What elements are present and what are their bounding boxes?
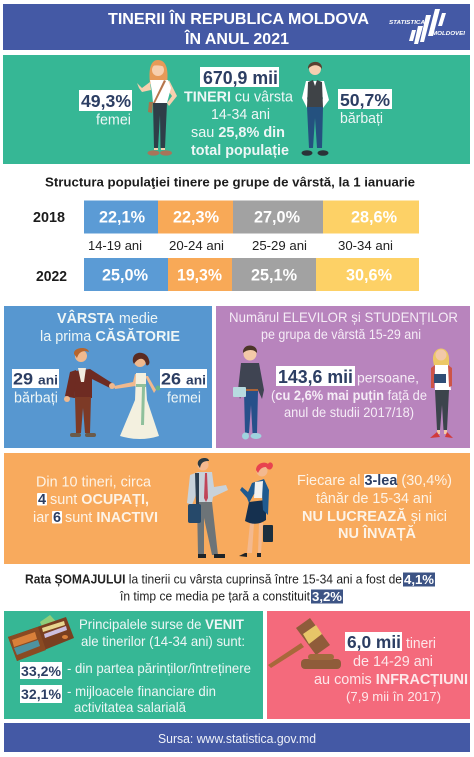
figure: groom bbox=[64, 348, 115, 437]
bar 2018: 28,6% bbox=[351, 208, 397, 226]
text: unemployment rate: Rata ȘOMAJULUI la tinerii cu vârsta cuprinsă între 15-34 ani a fost de bbox=[25, 572, 402, 586]
marriage heading: la prima CĂSĂTORIE bbox=[40, 328, 180, 345]
bar 2022 bbox=[36, 258, 419, 291]
panel: offences bbox=[267, 611, 470, 719]
income heading: ale tinerilor (14-34 ani) sunt: bbox=[81, 633, 245, 649]
stat: 49,3% women bbox=[79, 90, 132, 128]
stat: 32,1% salary bbox=[20, 683, 216, 715]
stat: 29 years men bbox=[12, 369, 59, 406]
age group labels: 14-19 ani bbox=[88, 238, 142, 253]
stat: 32,1% salary: - mijloacele financiare din bbox=[67, 683, 216, 699]
pupils heading: pe grupa de vârstă 15-29 ani bbox=[261, 326, 421, 342]
footer: source: Sursa: www.statistica.gov.md bbox=[158, 731, 316, 746]
bar 2018 bbox=[33, 200, 419, 234]
stat: 670,9 mii youth bbox=[184, 67, 294, 159]
figure: young woman bbox=[137, 60, 177, 156]
pupils heading bbox=[229, 309, 458, 342]
marriage heading: VÂRSTA medie bbox=[57, 309, 158, 327]
bar 2022: 30,6% bbox=[346, 266, 392, 284]
age group labels: 25-29 ani bbox=[252, 238, 307, 253]
stat: 670,9 mii youth: TINERI cu vârsta bbox=[184, 90, 294, 106]
stat: 143,6 thousand persons: (cu 2,6% mai puțin față de bbox=[271, 387, 427, 403]
text: unemployment rate bbox=[25, 572, 435, 604]
logo: Statistica Moldovei: MOLDOVEI bbox=[432, 31, 466, 37]
title: ÎN ANUL 2021 bbox=[184, 29, 289, 48]
bar 2022: 25,1% bbox=[251, 266, 297, 284]
title: TINERII ÎN REPUBLICA MOLDOVA bbox=[108, 9, 369, 28]
stat: 50,7% men bbox=[338, 89, 392, 127]
stat: 670,9 mii youth: 670,9 mii bbox=[203, 68, 278, 88]
age group labels bbox=[88, 238, 393, 253]
text: occupied and inactive: iar 6 sunt INACTIVI bbox=[33, 509, 158, 526]
bar 2018: 2018 bbox=[33, 210, 65, 226]
stat: 143,6 thousand persons: 143,6 mii bbox=[278, 367, 353, 387]
text: unemployment rate: 4,1% bbox=[404, 572, 434, 587]
figure: male student bbox=[233, 346, 264, 440]
header panel bbox=[3, 4, 470, 50]
logo: Statistica Moldovei bbox=[389, 9, 466, 44]
stat: 6,0 thousand youth: tineri bbox=[406, 636, 436, 652]
text: not working nor studying bbox=[297, 473, 452, 542]
stat: 32,1% salary: activitatea salarială bbox=[74, 699, 186, 715]
text: unemployment rate: 3,2% bbox=[312, 589, 342, 604]
text: occupied and inactive bbox=[33, 474, 158, 526]
text: not working nor studying: tânăr de 15-34 ani bbox=[316, 491, 432, 507]
bar 2018: 22,3% bbox=[173, 208, 219, 226]
stat: 33,2% parents bbox=[20, 660, 251, 680]
text: occupied and inactive: 4 sunt OCUPAȚI, bbox=[38, 491, 149, 508]
text: unemployment rate: în timp ce media pe țară a constituit bbox=[119, 588, 310, 604]
panel: employment bbox=[4, 453, 470, 564]
panel: income sources bbox=[4, 611, 263, 719]
stat: 6,0 thousand youth: 6,0 mii bbox=[347, 632, 401, 652]
stat: 143,6 thousand persons bbox=[271, 366, 427, 420]
bar 2022: 19,3% bbox=[177, 266, 222, 284]
age group labels: 30-34 ani bbox=[338, 238, 393, 253]
chart heading: Structura populaţiei tinere pe grupe de vârstă, la 1 ianuarie bbox=[45, 174, 415, 190]
income heading bbox=[79, 616, 245, 649]
stat: 49,3% women: femei bbox=[96, 112, 131, 128]
figure: young man bbox=[302, 62, 329, 156]
pupils heading: Numărul ELEVILOR și STUDENȚILOR bbox=[229, 309, 458, 325]
stat: 49,3% women: 49,3% bbox=[81, 91, 131, 111]
bar 2018: 27,0% bbox=[254, 208, 300, 226]
figure: bride bbox=[114, 353, 160, 439]
text: not working nor studying: NU LUCREAZĂ și nici bbox=[302, 508, 447, 525]
title bbox=[108, 9, 369, 48]
stat: 26 years women: femei bbox=[167, 390, 201, 406]
figure: businesswoman bbox=[239, 462, 273, 557]
stat: 670,9 mii youth: total populație bbox=[191, 143, 289, 159]
stat: 26 years women bbox=[160, 369, 207, 406]
stacked bar chart: age structure bbox=[33, 200, 419, 291]
stat: 50,7% men: 50,7% bbox=[340, 90, 390, 110]
stat: 26 years women: 26 ani bbox=[161, 370, 206, 388]
stat: 6,0 thousand youth bbox=[314, 632, 468, 704]
stat: 33,2% parents: - din partea părinților/întreținere bbox=[67, 660, 251, 676]
stat: 6,0 thousand youth: au comis INFRACȚIUNI bbox=[314, 672, 468, 688]
text: not working nor studying: Fiecare al 3-lea (30,4%) bbox=[297, 473, 452, 489]
panel: age at first marriage bbox=[4, 306, 212, 448]
panel: pupils and students bbox=[216, 306, 470, 448]
logo: Statistica Moldovei: STATISTICA bbox=[389, 20, 425, 26]
stat: 6,0 thousand youth: (7,9 mii în 2017) bbox=[346, 689, 441, 704]
stat: 32,1% salary: 32,1% bbox=[21, 687, 61, 703]
income heading: Principalele surse de VENIT bbox=[79, 616, 244, 632]
stat: 143,6 thousand persons: persoane, bbox=[357, 370, 419, 386]
age group labels: 20-24 ani bbox=[169, 238, 224, 253]
icon: wallet bbox=[8, 615, 74, 661]
stat: 29 years men: 29 ani bbox=[13, 370, 58, 388]
stat: 143,6 thousand persons: anul de studii 2017/18) bbox=[284, 404, 414, 420]
footer: source bbox=[4, 723, 470, 752]
stat: 33,2% parents: 33,2% bbox=[21, 664, 61, 680]
text: not working nor studying: NU ÎNVAȚĂ bbox=[338, 524, 417, 542]
bar 2018: 22,1% bbox=[99, 208, 145, 226]
bar 2022: 2022 bbox=[36, 269, 67, 285]
stat: 29 years men: bărbați bbox=[14, 390, 58, 406]
panel: total youth bbox=[3, 55, 470, 164]
stat: 670,9 mii youth: 14-34 ani bbox=[211, 107, 270, 123]
figure: businessman bbox=[187, 458, 228, 558]
stat: 670,9 mii youth: sau 25,8% din bbox=[191, 125, 285, 141]
text: occupied and inactive: Din 10 tineri, circa bbox=[36, 474, 152, 490]
marriage heading bbox=[40, 309, 180, 345]
figure: female student bbox=[430, 348, 453, 438]
stat: 50,7% men: bărbați bbox=[340, 111, 383, 127]
bar 2022: 25,0% bbox=[102, 266, 148, 284]
icon: gavel bbox=[268, 618, 341, 669]
stat: 6,0 thousand youth: de 14-29 ani bbox=[353, 654, 433, 670]
